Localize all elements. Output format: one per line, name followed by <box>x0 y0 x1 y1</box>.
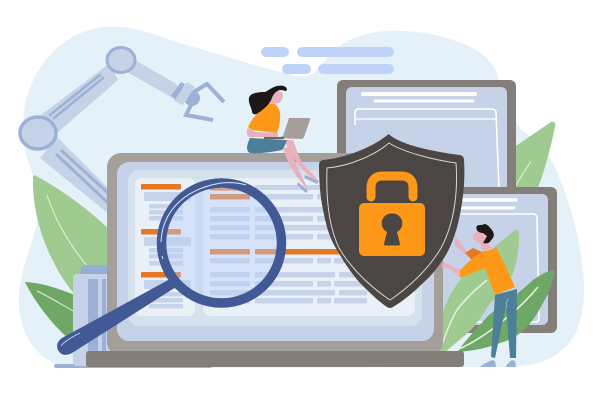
leaf behind tablets <box>505 122 555 200</box>
small laptop <box>278 118 310 139</box>
shirt <box>248 103 280 133</box>
back arm <box>455 235 467 255</box>
ground line <box>54 364 212 368</box>
laptop <box>86 153 464 367</box>
pants <box>491 289 517 358</box>
ring <box>162 183 282 303</box>
right panel <box>203 178 415 316</box>
gripper <box>171 82 224 120</box>
head <box>270 90 283 104</box>
ring highlight <box>161 183 246 259</box>
hair <box>249 86 287 114</box>
man <box>442 224 517 367</box>
magnifying glass <box>57 183 281 355</box>
padlock <box>359 176 425 256</box>
front hand <box>442 262 460 277</box>
woman with laptop <box>247 86 319 193</box>
skirt <box>247 138 287 153</box>
screen inner area <box>128 170 422 326</box>
left dark leaf <box>25 282 80 340</box>
shoes <box>304 175 319 184</box>
laptop screen <box>117 162 434 341</box>
shoes <box>480 360 496 367</box>
sweater <box>460 248 515 295</box>
laptop base <box>86 351 464 367</box>
left panel <box>135 178 195 316</box>
robot arm <box>20 48 224 215</box>
server tower <box>73 265 113 366</box>
handle <box>57 279 176 355</box>
neck and head <box>473 230 492 251</box>
hair <box>476 224 494 243</box>
legs <box>285 140 318 183</box>
laptop body <box>107 153 443 356</box>
front tablet <box>440 187 557 333</box>
back tablet <box>337 80 516 245</box>
left large leaf <box>33 175 115 300</box>
arm <box>247 128 278 137</box>
cloud pills <box>261 47 394 74</box>
lens <box>166 187 278 299</box>
shield <box>319 134 464 308</box>
right foreground leaves <box>436 230 555 352</box>
